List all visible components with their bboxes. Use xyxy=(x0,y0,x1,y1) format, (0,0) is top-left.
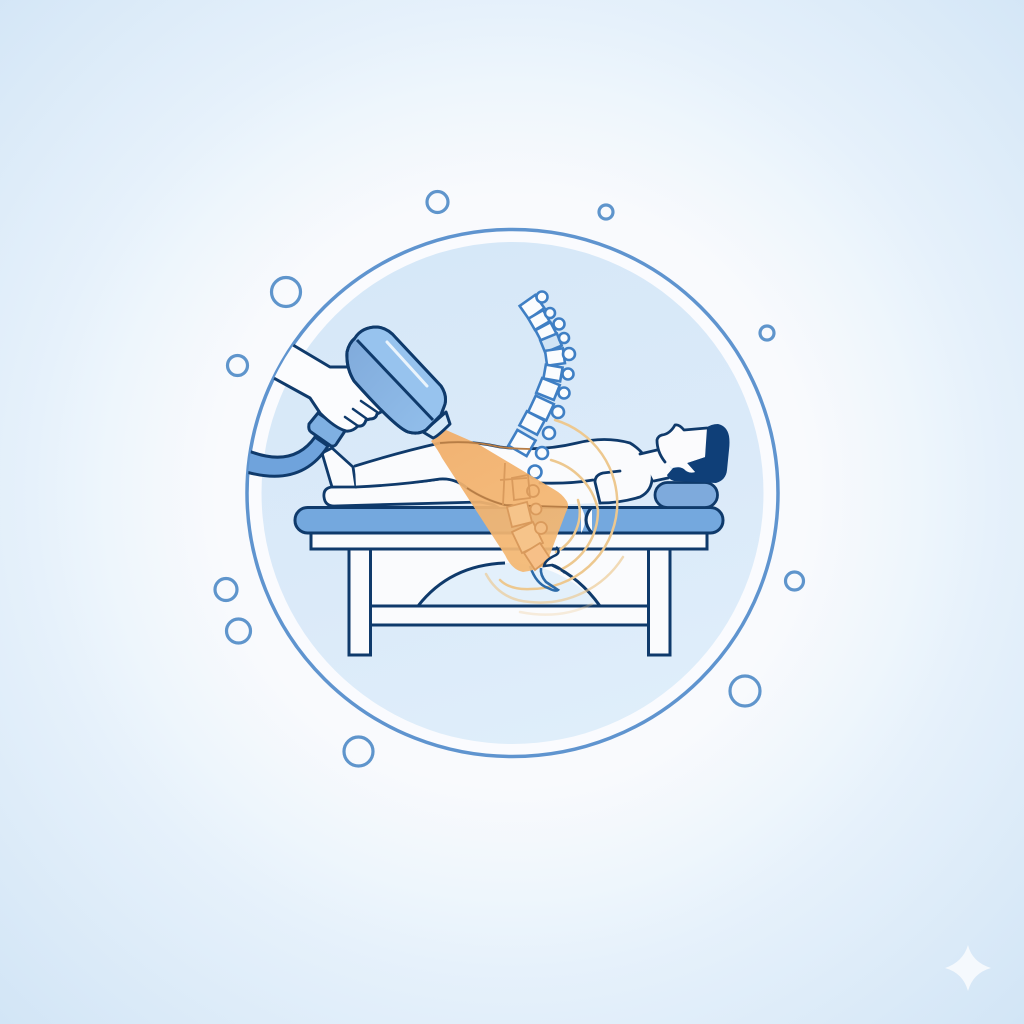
sparkle watermark xyxy=(945,945,991,991)
treatment table xyxy=(295,507,723,655)
patient body xyxy=(322,440,672,507)
spine lines seen through beam xyxy=(440,442,568,570)
circular frame xyxy=(247,230,778,756)
device head xyxy=(345,327,450,438)
head and hair xyxy=(657,424,730,483)
leg cushion xyxy=(324,479,500,506)
device cable xyxy=(240,437,328,476)
hand xyxy=(270,345,387,431)
torso and thigh xyxy=(355,440,652,507)
arm xyxy=(540,471,620,503)
therapy hand-piece device xyxy=(240,345,387,476)
pillow xyxy=(655,482,718,508)
orange energy beam xyxy=(431,430,568,572)
lower leg xyxy=(322,448,356,487)
neck xyxy=(640,450,672,481)
device handle xyxy=(309,413,345,446)
floating bubbles xyxy=(215,192,804,766)
finger lines xyxy=(345,401,377,426)
lowest vertebra notch xyxy=(544,547,565,573)
spine xyxy=(508,292,575,591)
energy rings xyxy=(486,420,623,615)
